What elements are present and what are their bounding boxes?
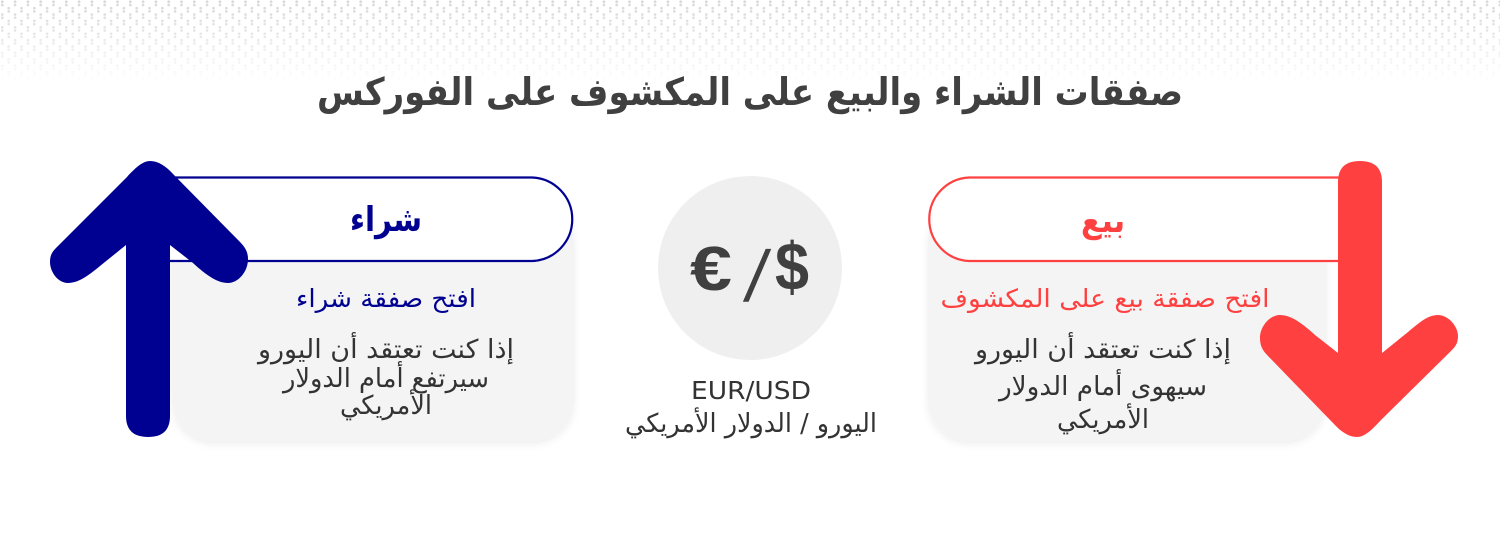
currency circle: [658, 176, 842, 360]
currency symbols: /: [740, 236, 774, 317]
buy description: سيرتفع أمام الدولار: [281, 360, 489, 394]
sell subheading: افتح صفقة بيع على المكشوف: [940, 284, 1270, 314]
sell heading: بيع: [1081, 201, 1125, 241]
pair label arabic: اليورو / الدولار الأمريكي: [625, 406, 877, 439]
panel: currency pair: [625, 176, 877, 439]
buy card body: [172, 200, 574, 441]
pair label: EUR/USD: [691, 376, 811, 405]
buy pill header: [152, 178, 572, 261]
sell pill header: [929, 178, 1360, 261]
sell card body: [928, 200, 1326, 441]
icon: up arrow: [50, 161, 248, 437]
buy subheading: افتح صفقة شراء: [296, 284, 476, 314]
panel: sell: [928, 178, 1360, 441]
sell description: سيهوى أمام الدولار: [997, 368, 1207, 402]
icon: down arrow: [1260, 161, 1458, 437]
background dot pattern: [1, 0, 1500, 66]
buy description: [256, 331, 514, 421]
buy heading: شراء: [350, 200, 422, 240]
currency symbols: $: [775, 229, 809, 305]
currency symbols: €: [690, 235, 732, 304]
sell description: [973, 331, 1231, 435]
buy description: الأمريكي: [340, 388, 432, 421]
currency symbols: [690, 229, 809, 317]
buy description: إذا كنت تعتقد أن اليورو: [256, 331, 514, 365]
panel: buy: [152, 178, 574, 441]
sell description: الأمريكي: [1057, 402, 1149, 435]
title: صفقات الشراء والبيع على المكشوف على الفوركس: [317, 70, 1183, 115]
sell description: إذا كنت تعتقد أن اليورو: [973, 331, 1231, 365]
